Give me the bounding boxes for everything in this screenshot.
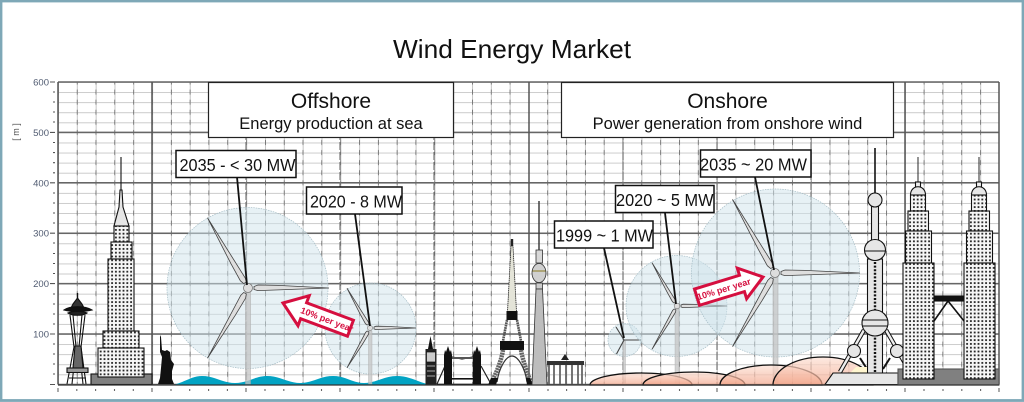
callout: 2035 offshore — [176, 150, 296, 285]
icon: Oriental Pearl Tower — [825, 148, 906, 384]
y axis: 300 — [33, 228, 49, 240]
onshore hills — [590, 357, 873, 385]
callout: 2035 offshore: 2035 - < 30 MW — [180, 155, 296, 175]
callout: 1999 onshore: 1999 ~ 1 MW — [556, 226, 653, 246]
y axis: 500 — [33, 128, 49, 139]
callout: 2035 onshore: 2035 ~ 20 MW — [700, 154, 807, 174]
y axis — [33, 78, 55, 384]
icon: Space Needle — [64, 293, 92, 384]
panel: onshore heading — [562, 82, 894, 138]
baseline — [58, 384, 999, 386]
callout: 1999 onshore — [554, 221, 653, 338]
y axis: 200 — [33, 279, 49, 290]
y axis: 100 — [33, 330, 49, 340]
panel: offshore heading: Offshore — [291, 90, 371, 113]
turbine: onshore 2035 — [692, 189, 860, 384]
arrow: offshore 10% per year: 10% per year — [299, 305, 355, 334]
y axis: 400 — [33, 178, 49, 190]
icon: Big Ben — [426, 336, 436, 385]
icon: Empire State Building — [91, 157, 152, 384]
y axis: 600 — [33, 78, 49, 88]
arrow: offshore 10% per year — [277, 288, 359, 344]
arrow: onshore 10% per year — [692, 262, 768, 312]
turbine: onshore 2020 — [626, 256, 727, 384]
callout: 2020 offshore — [306, 187, 402, 326]
sea waves — [173, 376, 431, 385]
panel: onshore heading: Onshore — [687, 90, 768, 113]
icon: Statue of Liberty — [158, 335, 174, 384]
icon: Fernsehturm — [532, 201, 547, 385]
icon: Tower Bridge — [437, 346, 492, 384]
callout: 2020 onshore: 2020 ~ 5 MW — [616, 190, 714, 210]
callout: 2020 offshore: 2020 - 8 MW — [310, 192, 402, 212]
callout: 2020 onshore — [616, 186, 714, 304]
title: Wind Energy Market — [393, 34, 632, 64]
callout: 2035 onshore — [700, 150, 811, 270]
arrow: onshore 10% per year: 10% per year — [696, 276, 752, 302]
icon: Eiffel Tower — [488, 239, 533, 385]
turbine: offshore 2020 — [325, 283, 416, 384]
x axis ticks — [58, 388, 999, 392]
turbine: onshore 1999 — [608, 324, 641, 384]
icon: Brandenburg Gate — [547, 354, 584, 385]
icon: Petronas Towers — [898, 157, 999, 385]
turbine: offshore 2035 — [167, 208, 329, 384]
panel: onshore heading: Power generation from onshore wind — [593, 115, 862, 133]
y axis unit: [ m ] — [11, 123, 21, 141]
panel: offshore heading — [208, 82, 454, 138]
chart grid — [58, 82, 999, 384]
panel: offshore heading: Energy production at sea — [239, 115, 424, 133]
